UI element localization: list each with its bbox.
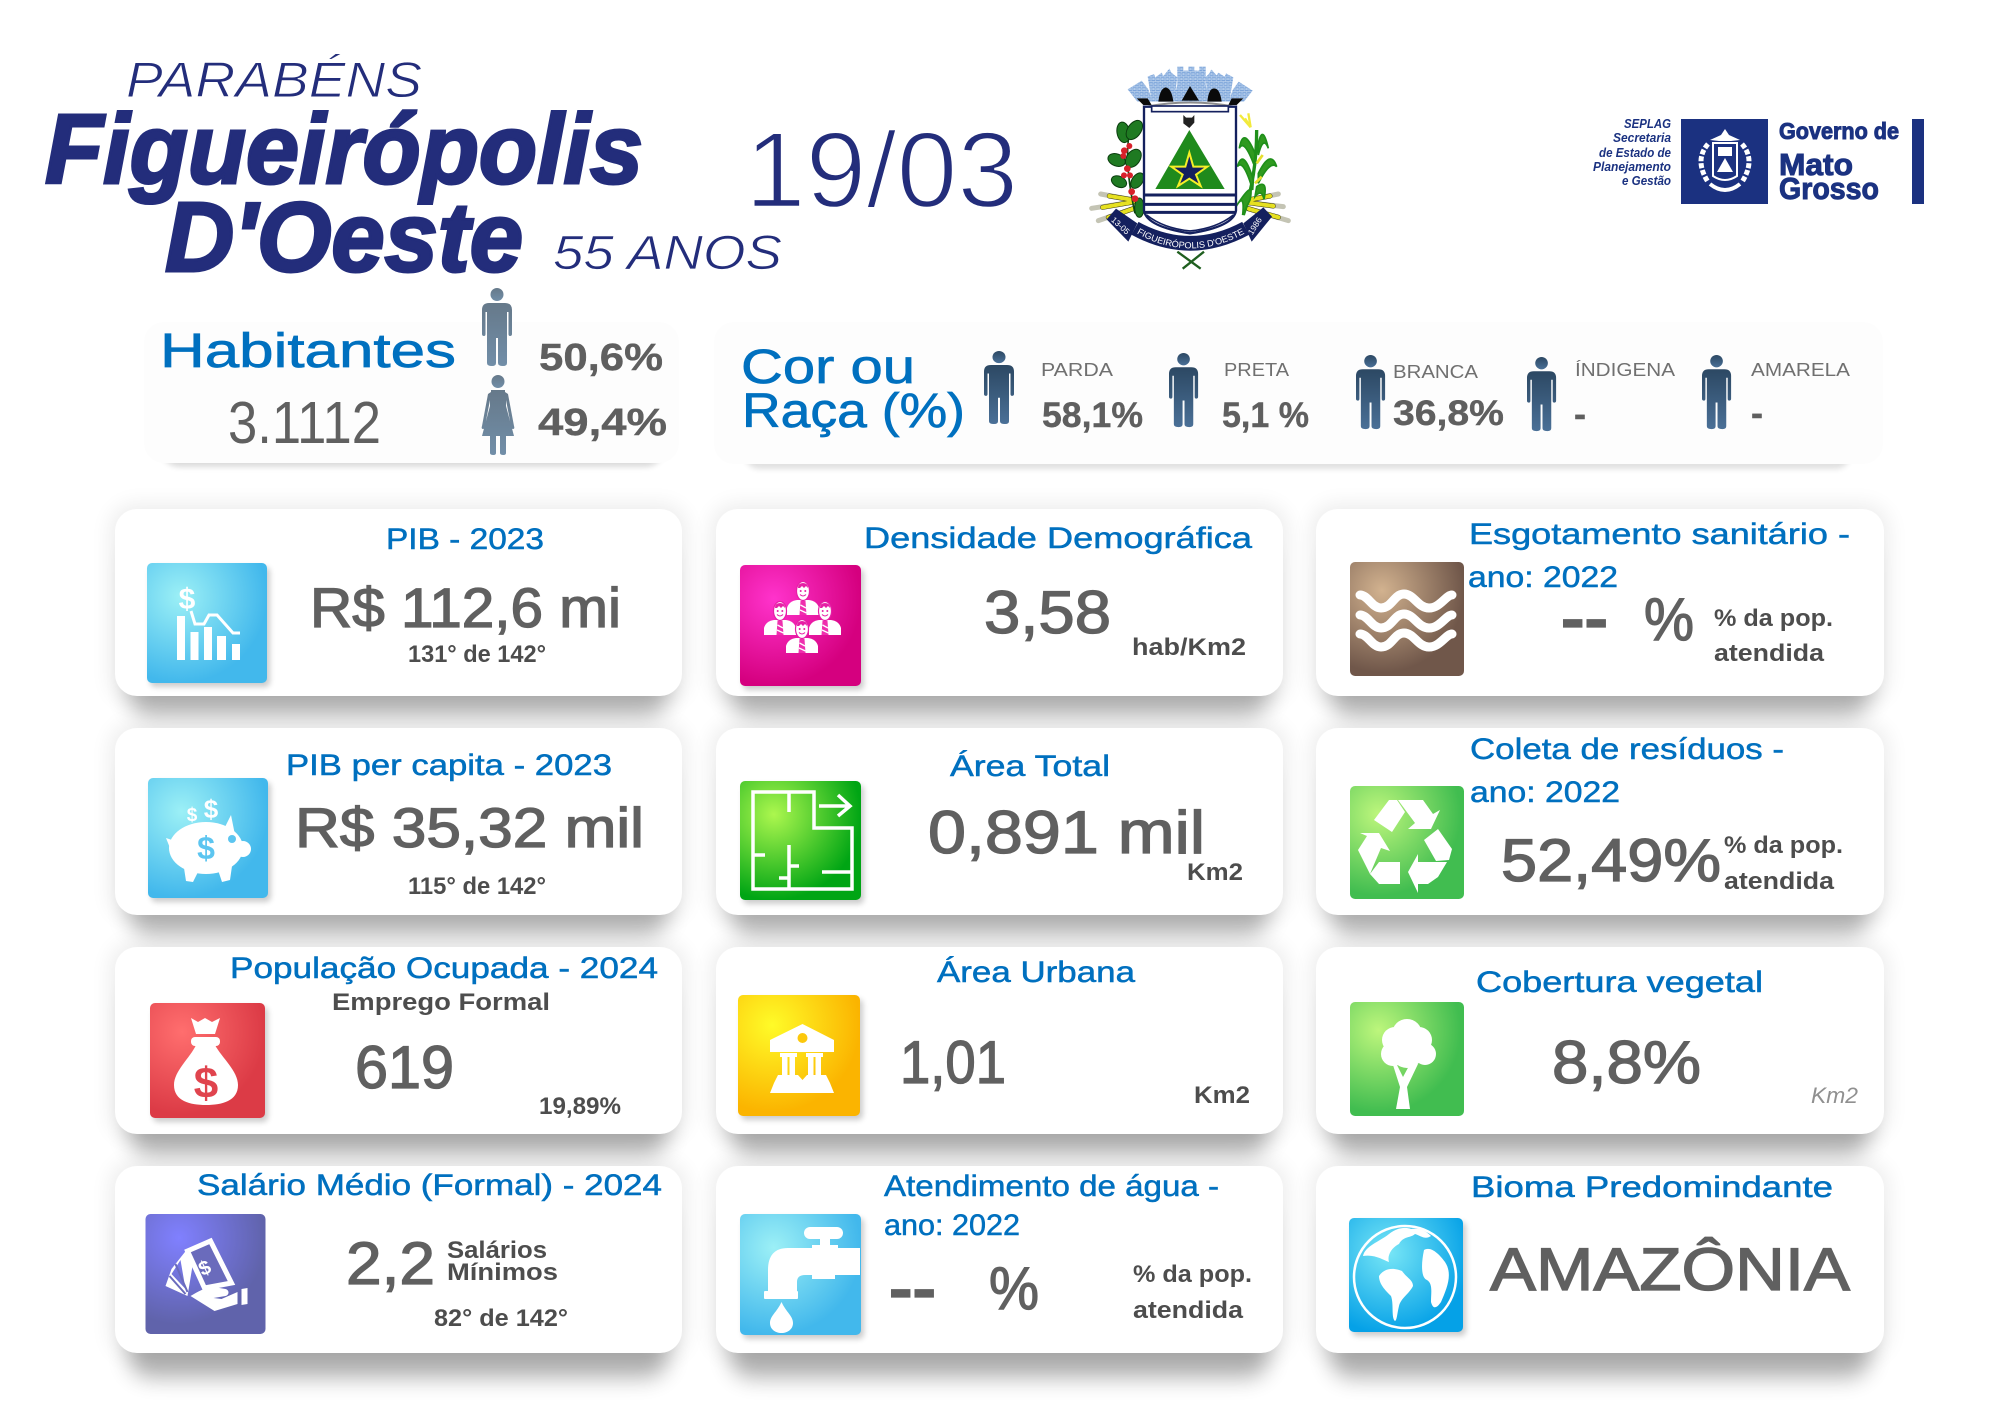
heading: Área Total xyxy=(950,750,1110,783)
value: 2,2 xyxy=(346,1230,435,1297)
icon: piggy bank: $ xyxy=(187,805,198,826)
corn plant xyxy=(1236,113,1277,215)
heading: city name line 1: Figueirópolis xyxy=(45,94,643,204)
ranking: 82° de 142° xyxy=(434,1305,568,1332)
icon: recycling xyxy=(1350,786,1464,899)
icon: waves xyxy=(1350,562,1464,676)
panel: população ocupada xyxy=(111,943,686,1154)
ranking: 115° de 142° xyxy=(408,873,546,900)
icon: people xyxy=(740,565,864,690)
heading: city name line 2: D'Oeste xyxy=(165,182,523,292)
value: -- xyxy=(889,1255,936,1322)
unit: % da pop. xyxy=(1714,605,1833,632)
unit: Salários xyxy=(447,1237,547,1264)
group: parda xyxy=(984,351,1143,435)
group: preta xyxy=(1169,353,1309,435)
group: branca xyxy=(1356,355,1504,433)
icon: falling chart xyxy=(147,563,270,687)
value: 1,01 xyxy=(900,1029,1006,1096)
panel: cor ou raça xyxy=(714,322,1883,469)
icon: tree xyxy=(1350,1002,1464,1116)
icon: money in hand xyxy=(146,1214,266,1334)
icon: globe xyxy=(1349,1218,1466,1336)
wheat xyxy=(1092,194,1288,221)
unit: % da pop. xyxy=(1724,832,1843,859)
unit: atendida xyxy=(1133,1297,1244,1324)
group: branca: BRANCA xyxy=(1393,362,1478,382)
percent sign: % xyxy=(1644,586,1694,653)
logo square with state emblem xyxy=(1681,119,1768,204)
percent sign: % xyxy=(989,1255,1039,1322)
panel: densidade demográfica xyxy=(712,505,1287,716)
panel: esgotamento sanitário xyxy=(1312,505,1888,716)
group: indígena: ÍNDIGENA xyxy=(1575,360,1675,380)
heading: ano: 2022 xyxy=(884,1209,1020,1242)
logo wordmark: Governo de xyxy=(1779,118,1899,144)
heading: Área Urbana xyxy=(937,956,1135,989)
value: 0,891 mil xyxy=(928,799,1205,866)
ranking: 131° de 142° xyxy=(408,641,546,668)
heading: População Ocupada - 2024 xyxy=(230,952,658,985)
value: R$ 112,6 mi xyxy=(310,576,621,639)
motto ribbon: FIGUEIRÓPOLIS D'OESTE xyxy=(1137,228,1244,248)
share: 19,89% xyxy=(539,1093,621,1120)
group: preta: 5,1 % xyxy=(1222,396,1309,435)
group: branca: 36,8% xyxy=(1393,394,1504,433)
icon: money in hand: $ xyxy=(195,1256,215,1281)
heading: Habitantes: Habitantes xyxy=(160,325,456,378)
heading: Salário Médio (Formal) - 2024 xyxy=(197,1169,662,1202)
unit: Km2 xyxy=(1811,1083,1858,1108)
motto ribbon xyxy=(1106,207,1272,251)
panel: área total xyxy=(712,724,1287,935)
unit xyxy=(447,1237,558,1286)
icon: woman xyxy=(482,375,514,455)
text: SEPLAG secretaria: e Gestão xyxy=(1622,173,1671,188)
panel: PIB per capita xyxy=(111,724,686,935)
text: SEPLAG secretaria: Planejamento xyxy=(1593,159,1671,174)
icon: falling chart: $ xyxy=(179,583,196,616)
text: SEPLAG secretaria xyxy=(1593,116,1671,188)
group: parda: 58,1% xyxy=(1042,396,1143,435)
heading: Cobertura vegetal xyxy=(1476,966,1763,999)
unit: hab/Km2 xyxy=(1132,634,1246,661)
icon: piggy bank: $ xyxy=(204,794,219,824)
panel: PIB xyxy=(111,505,686,716)
heading: Bioma Predomindante xyxy=(1471,1171,1833,1204)
value: population: 3.1112 xyxy=(228,390,381,456)
unit: Km2 xyxy=(1187,859,1243,886)
panel: salário médio xyxy=(111,1162,686,1378)
logo wordmark: Mato xyxy=(1779,147,1853,182)
unit: Km2 xyxy=(1194,1082,1250,1109)
logo wordmark xyxy=(1779,118,1899,206)
icon: public building xyxy=(738,995,863,1120)
value: R$ 35,32 mil xyxy=(295,796,644,859)
value: 3,58 xyxy=(984,579,1111,646)
motto ribbon: 13-05 xyxy=(1109,215,1132,237)
heading: PIB - 2023 xyxy=(386,523,544,556)
unit: % da pop. xyxy=(1133,1261,1252,1288)
subheading: Emprego Formal xyxy=(332,989,550,1016)
icon: man xyxy=(482,288,512,366)
group: parda: PARDA xyxy=(1041,360,1113,380)
heading: ano: 2022 xyxy=(1468,561,1618,594)
text: SEPLAG secretaria: SEPLAG xyxy=(1624,116,1671,131)
logo: SEPLAG / Governo de Mato Grosso xyxy=(1593,116,1924,206)
value: -- xyxy=(1561,585,1608,652)
icon: piggy bank xyxy=(148,778,271,902)
value: female share: 49,4% xyxy=(538,402,667,444)
heading: Cor ou Raça: Cor ou xyxy=(741,341,915,394)
panel: área urbana xyxy=(712,943,1287,1154)
icon: faucet xyxy=(740,1214,864,1339)
icon: money bag: $ xyxy=(194,1059,218,1108)
panel: habitantes xyxy=(144,288,679,467)
panel: atendimento de água xyxy=(712,1162,1287,1378)
mural crown xyxy=(1128,67,1253,107)
icon: piggy bank: $ xyxy=(197,830,215,866)
unit: Mínimos xyxy=(447,1259,558,1286)
text: SEPLAG secretaria: de Estado de xyxy=(1599,145,1671,160)
unit: atendida xyxy=(1724,868,1835,895)
group: amarela xyxy=(1702,355,1850,433)
text: SEPLAG secretaria: Secretaria xyxy=(1613,130,1671,145)
value: AMAZÔNIA xyxy=(1490,1236,1850,1303)
group: indígena: - xyxy=(1574,395,1586,434)
title block xyxy=(45,52,1018,292)
value: 8,8% xyxy=(1552,1029,1701,1096)
heading: Esgotamento sanitário - xyxy=(1469,518,1850,551)
panel: cobertura vegetal xyxy=(1312,943,1888,1154)
panel: bioma predominante xyxy=(1312,1162,1888,1378)
group: amarela: AMARELA xyxy=(1751,360,1850,380)
unit xyxy=(1133,1261,1252,1324)
unit: atendida xyxy=(1714,640,1825,667)
heading: date: 19/03 xyxy=(745,109,1018,230)
group: indígena xyxy=(1527,357,1675,434)
value: 52,49% xyxy=(1501,827,1721,894)
value: 619 xyxy=(355,1034,454,1101)
heading: PARABÉNS: PARABÉNS xyxy=(126,52,422,108)
unit xyxy=(1724,832,1843,895)
value: male share: 50,6% xyxy=(539,337,663,379)
coffee branch xyxy=(1106,117,1147,217)
icon: money bag xyxy=(150,1003,268,1122)
group: preta: PRETA xyxy=(1224,360,1289,380)
shield xyxy=(1144,106,1236,233)
unit xyxy=(1714,605,1833,667)
heading xyxy=(1468,518,1850,594)
heading: Densidade Demográfica xyxy=(864,522,1252,555)
heading: PIB per capita - 2023 xyxy=(286,749,612,782)
heading: Cor ou Raça: Raça (%) xyxy=(742,385,965,438)
heading: Coleta de resíduos - xyxy=(1470,733,1784,766)
heading: 55 anos: 55 ANOS xyxy=(553,227,782,280)
heading: Atendimento de água - xyxy=(884,1170,1219,1203)
heading xyxy=(1470,733,1784,809)
panel: coleta de resíduos xyxy=(1312,724,1888,935)
crossed stems xyxy=(1177,252,1204,269)
icon: floor plan xyxy=(740,781,864,904)
logo wordmark: Grosso xyxy=(1779,171,1879,206)
heading: ano: 2022 xyxy=(1470,776,1620,809)
heading: Cor ou Raça xyxy=(741,341,965,438)
group: amarela: - xyxy=(1751,394,1763,433)
heading xyxy=(884,1170,1219,1242)
motto ribbon: 1986 xyxy=(1246,215,1264,236)
icon: municipal coat of arms xyxy=(1089,66,1291,270)
